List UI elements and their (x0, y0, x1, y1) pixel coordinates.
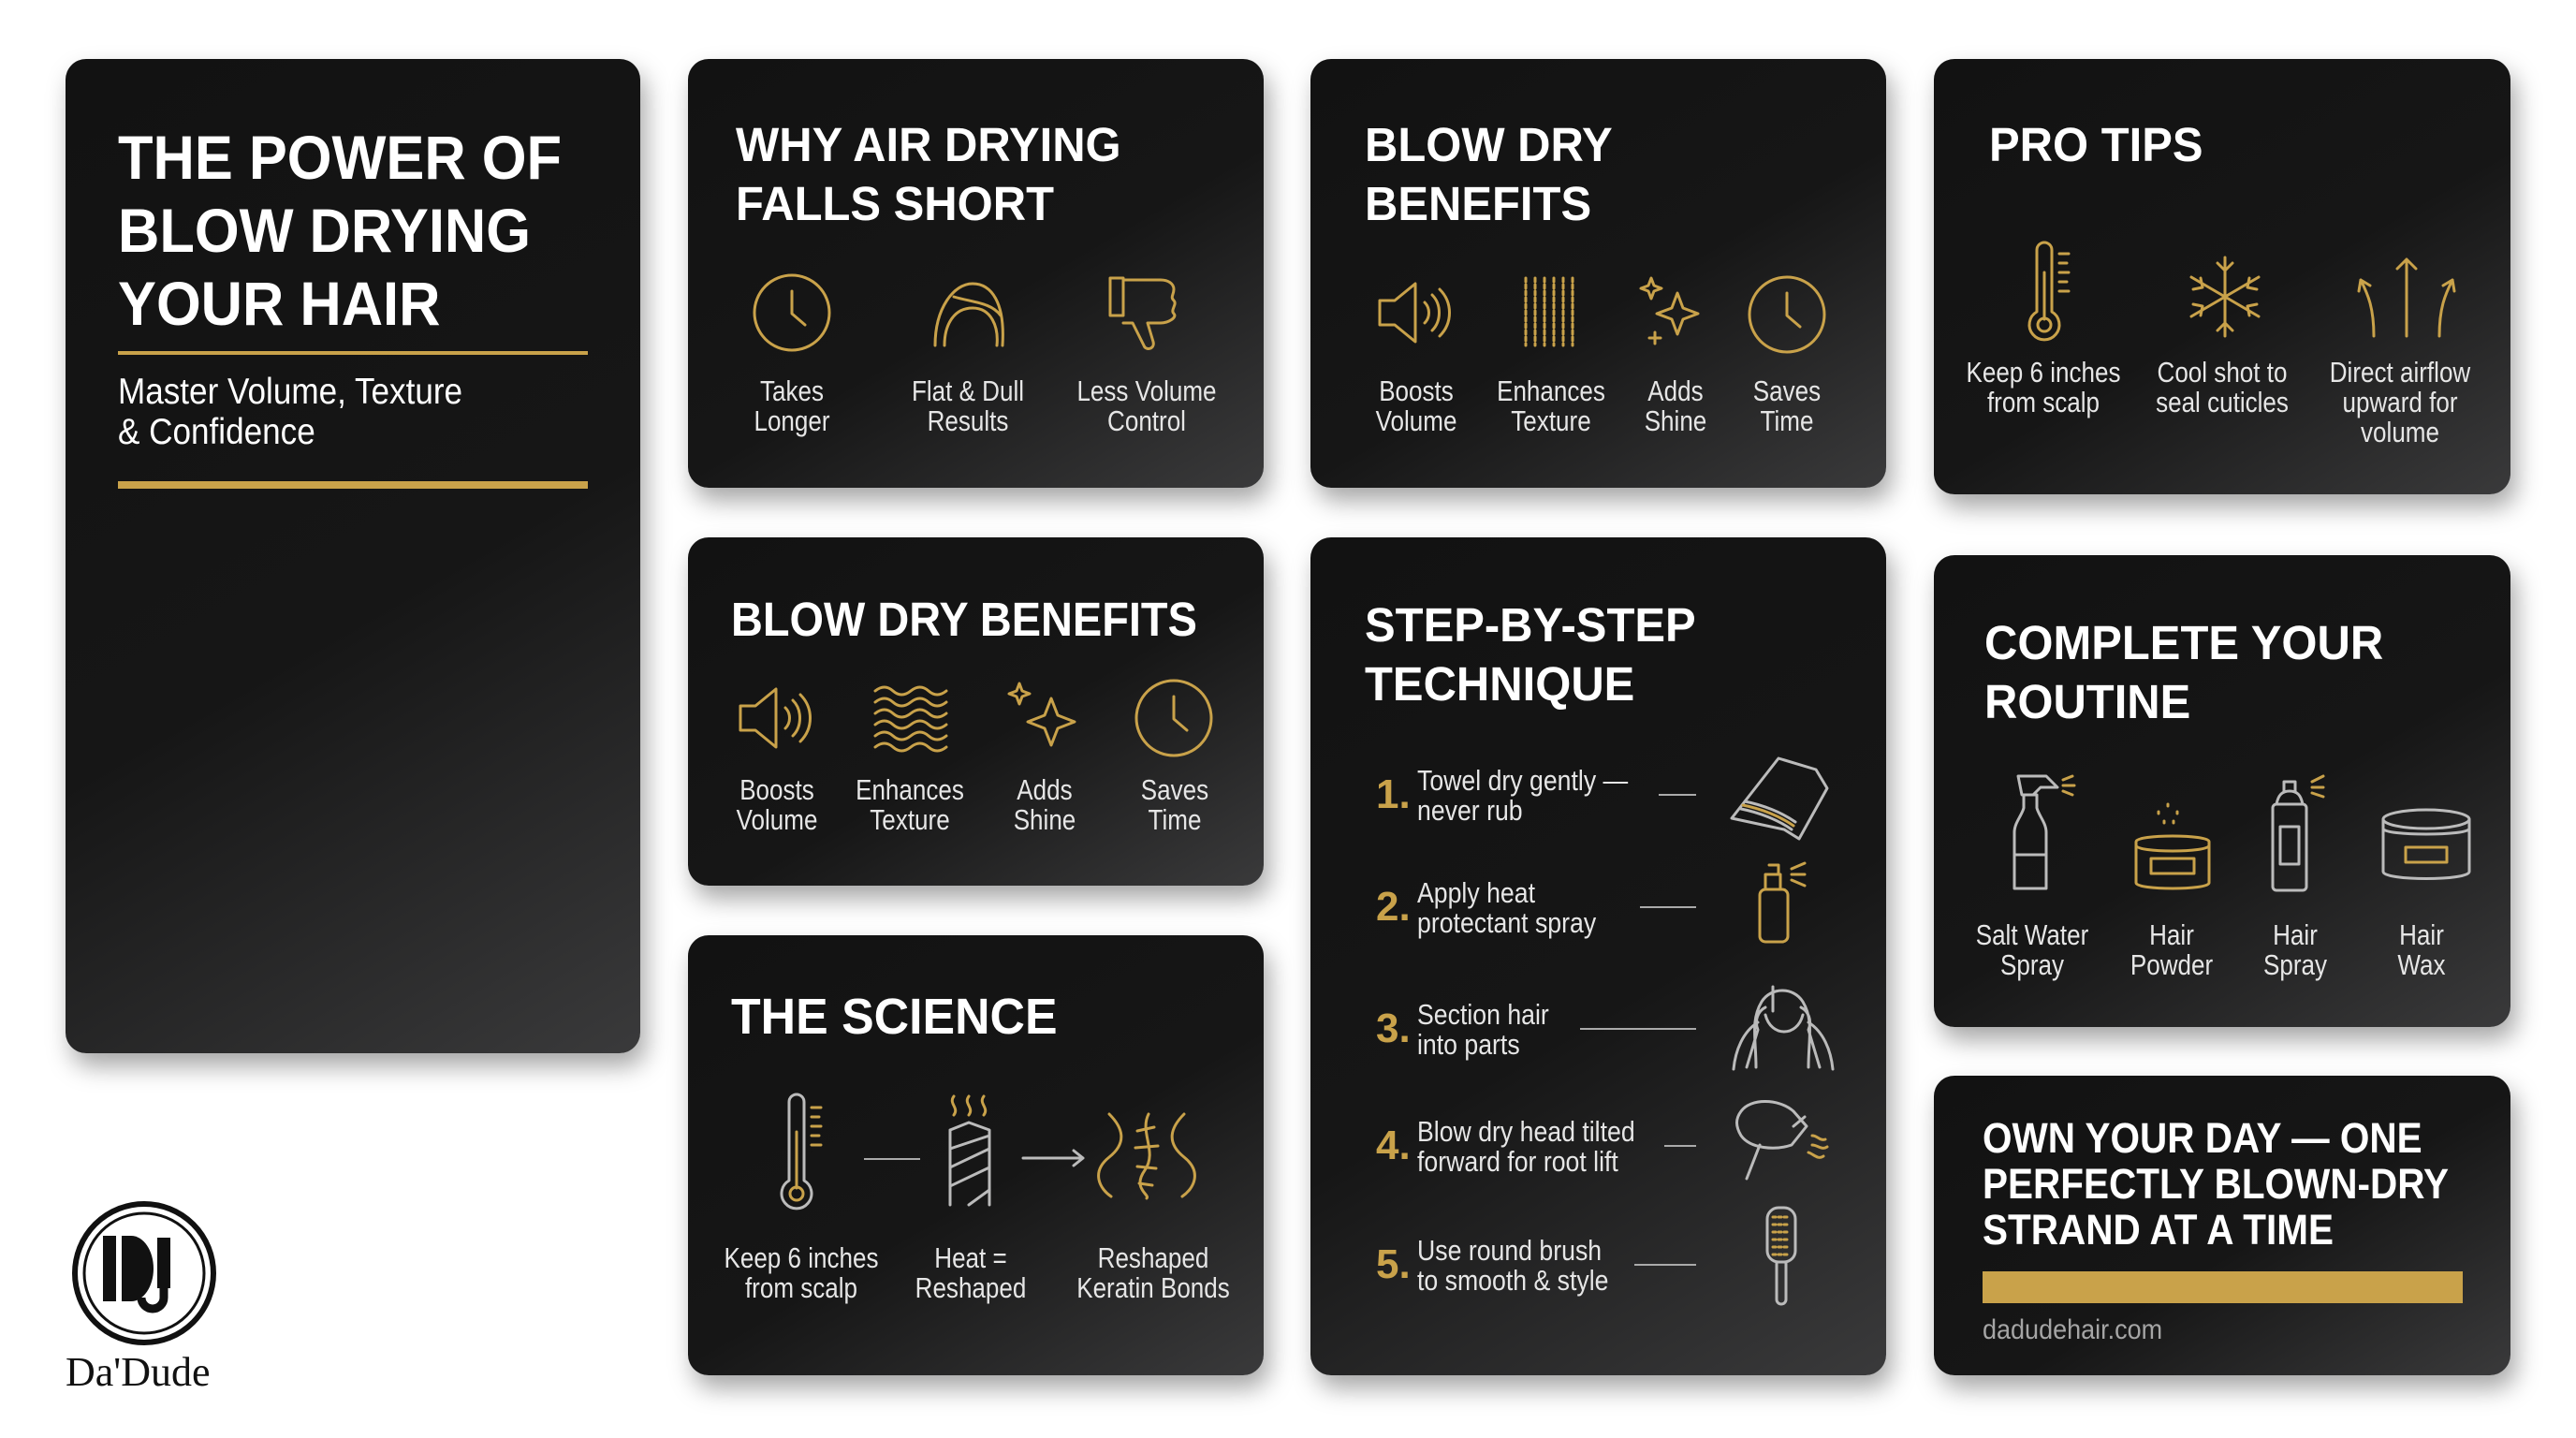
gold bar (118, 481, 588, 489)
labels: Volume (737, 803, 817, 836)
tagline (1983, 1115, 2449, 1253)
panel: blow dry benefits (top): Adds (1647, 374, 1704, 407)
title: BLOW DRYING (118, 196, 531, 265)
step 5 (1376, 1206, 1797, 1305)
panel: the science: Reshaped (1098, 1241, 1208, 1274)
panel: step-by-step technique (1310, 537, 1886, 1375)
url: dadudehair.com (1983, 1314, 2162, 1345)
icon: thermometer (781, 1093, 822, 1210)
panel: blow dry benefits (middle): Shine (1014, 803, 1076, 836)
panel: closing tagline (1934, 1076, 2510, 1375)
icon: heated hair strand (949, 1094, 991, 1207)
heading (1365, 598, 1696, 711)
panel: blow dry benefits (top): Enhances (1497, 374, 1605, 407)
labels: from scalp (1987, 386, 2100, 418)
icon: arrows up (2357, 257, 2456, 337)
icon: clock (1749, 275, 1825, 354)
panel: the science (688, 935, 1264, 1375)
panel: blow dry benefits (middle) (688, 537, 1264, 886)
icon: speaker (739, 687, 812, 749)
step 5: 5. (1376, 1241, 1411, 1287)
labels: Volume (1376, 404, 1456, 437)
brand name: Da'Dude (66, 1349, 211, 1395)
icon: sectioning head (1732, 985, 1835, 1071)
icon: waves (873, 685, 948, 753)
panel: why air drying falls short: Control (1107, 404, 1186, 437)
logo (66, 1201, 216, 1395)
labels (1946, 920, 2118, 980)
heading: COMPLETE YOUR (1984, 616, 2383, 669)
panel: pro tips (1934, 59, 2510, 494)
step 2: protectant spray (1417, 906, 1596, 939)
panel: pro tips: upward for (2342, 386, 2458, 418)
connector line (864, 1158, 920, 1160)
icon: keratin bonds (1097, 1112, 1196, 1200)
panel: pro tips: seal cuticles (2156, 386, 2289, 418)
icon: snowflake (2189, 257, 2260, 337)
panel: pro tips: Direct airflow (2330, 356, 2470, 389)
icon: thermometer (2027, 242, 2071, 341)
labels: from scalp (745, 1271, 857, 1304)
heading: PRO TIPS (1989, 118, 2203, 171)
labels (724, 1241, 879, 1304)
step 4: forward for root lift (1417, 1145, 1618, 1178)
panel: complete your routine: Hair (2399, 918, 2444, 951)
icon: round brush (1765, 1206, 1797, 1305)
icon: clock (1134, 680, 1213, 756)
panel: pro tips: Cool shot to (2158, 356, 2287, 389)
icon: logo mark (72, 1201, 216, 1345)
heading: BENEFITS (1365, 177, 1591, 230)
labels: Boosts (1379, 374, 1454, 407)
step 5: Use round brush (1417, 1234, 1602, 1267)
subtitle: Master Volume, Texture (118, 372, 462, 412)
heading: WHY AIR DRYING (736, 118, 1121, 171)
step 3 (1376, 985, 1835, 1071)
heading: STEP-BY-STEP (1365, 598, 1696, 652)
panel: complete your routine: Wax (2397, 948, 2446, 981)
icon: sparkle (1640, 277, 1700, 345)
step 1 (1376, 756, 1829, 841)
labels: Boosts (739, 773, 814, 806)
panel: blow dry benefits (top): Texture (1511, 404, 1591, 437)
step 1: 1. (1376, 771, 1411, 817)
labels: Salt Water (1976, 918, 2088, 951)
panel: blow dry benefits (top): Time (1761, 404, 1813, 437)
icon: thumbs down (1108, 277, 1177, 350)
step 5: to smooth & style (1417, 1264, 1608, 1297)
icon: sparkle (1007, 682, 1076, 747)
panel: complete your routine: Powder (2130, 948, 2213, 981)
icon: texture (1524, 277, 1574, 346)
panel: why air drying falls short (688, 59, 1264, 488)
labels (1376, 374, 1456, 437)
panel: pro tips: volume (2361, 416, 2439, 448)
icon: speaker (1378, 282, 1451, 343)
step 2: Apply heat (1417, 876, 1535, 909)
panel: why air drying falls short: Less Volume (1076, 374, 1217, 407)
heading (736, 118, 1121, 230)
panel: the science: Keratin Bonds (1076, 1271, 1230, 1304)
icon: hair spray (2267, 770, 2342, 892)
heading (1365, 118, 1613, 230)
panel: blow dry benefits (top): Saves (1753, 374, 1821, 407)
panel: why air drying falls short: Results (928, 404, 1008, 437)
tagline: PERFECTLY BLOWN-DRY (1983, 1160, 2449, 1208)
icon: salt water spray (2005, 770, 2084, 892)
labels (754, 374, 830, 437)
heading: THE SCIENCE (731, 989, 1058, 1045)
labels: Longer (754, 404, 830, 437)
tagline: STRAND AT A TIME (1983, 1206, 2334, 1254)
icon: hair powder (2130, 799, 2215, 892)
arrow (1022, 1149, 1085, 1167)
panel: blow dry benefits (middle): Adds (1017, 773, 1073, 806)
icon: clock (753, 273, 831, 352)
icon: spray bottle (1758, 861, 1807, 944)
panel: blow dry benefits (middle): Saves (1141, 773, 1208, 806)
heading (1984, 613, 2383, 731)
panel: complete your routine: Spray (2263, 948, 2327, 981)
heading: ROUTINE (1984, 675, 2190, 728)
step 3: 3. (1376, 1005, 1411, 1051)
tagline: OWN YOUR DAY — ONE (1983, 1114, 2422, 1162)
labels (736, 773, 817, 836)
step 4 (1376, 1100, 1829, 1180)
step 4: Blow dry head tilted (1417, 1115, 1635, 1148)
step 4: 4. (1376, 1123, 1411, 1168)
step 1: Towel dry gently — (1417, 764, 1628, 797)
step 1: never rub (1417, 794, 1523, 827)
panel: complete your routine: Hair (2149, 918, 2194, 951)
labels: Takes (760, 374, 824, 407)
panel: why air drying falls short: Flat & Dull (912, 374, 1024, 407)
title: YOUR HAIR (118, 269, 440, 338)
panel: the science: Reshaped (915, 1271, 1026, 1304)
panel: blow dry benefits (top) (1310, 59, 1886, 488)
labels: Keep 6 inches (1966, 356, 2121, 389)
subtitle: & Confidence (118, 412, 315, 452)
panel: complete your routine (1934, 555, 2510, 1027)
title: THE POWER OF (118, 123, 562, 192)
labels: Keep 6 inches (724, 1241, 879, 1274)
panel: blow dry benefits (top): Shine (1645, 404, 1706, 437)
panel: blow dry benefits (middle): Enhances (856, 773, 964, 806)
gold rule (118, 351, 588, 355)
panel: complete your routine: Hair (2273, 918, 2318, 951)
panel: blow dry benefits (middle): Time (1149, 803, 1201, 836)
heading: BLOW DRY (1365, 118, 1613, 171)
labels (1966, 356, 2121, 418)
labels: Spray (2000, 948, 2064, 981)
panel: intro title (66, 59, 640, 1053)
panel: blow dry benefits (middle): Texture (870, 803, 950, 836)
heading: FALLS SHORT (736, 177, 1054, 230)
panel: the science: Heat = (934, 1241, 1007, 1274)
step 2 (1376, 861, 1807, 944)
icon: hair dryer (1735, 1100, 1829, 1180)
step 3: Section hair (1417, 998, 1549, 1031)
step 3: into parts (1417, 1028, 1520, 1061)
icon: towel (1730, 756, 1829, 841)
heading: BLOW DRY BENEFITS (731, 593, 1197, 646)
icon: flat hair (934, 283, 1004, 346)
title (118, 123, 562, 338)
gold bar (1983, 1271, 2463, 1303)
icon: hair wax (2379, 806, 2473, 890)
step 2: 2. (1376, 884, 1411, 930)
heading: TECHNIQUE (1365, 657, 1634, 711)
subtitle (118, 372, 462, 452)
